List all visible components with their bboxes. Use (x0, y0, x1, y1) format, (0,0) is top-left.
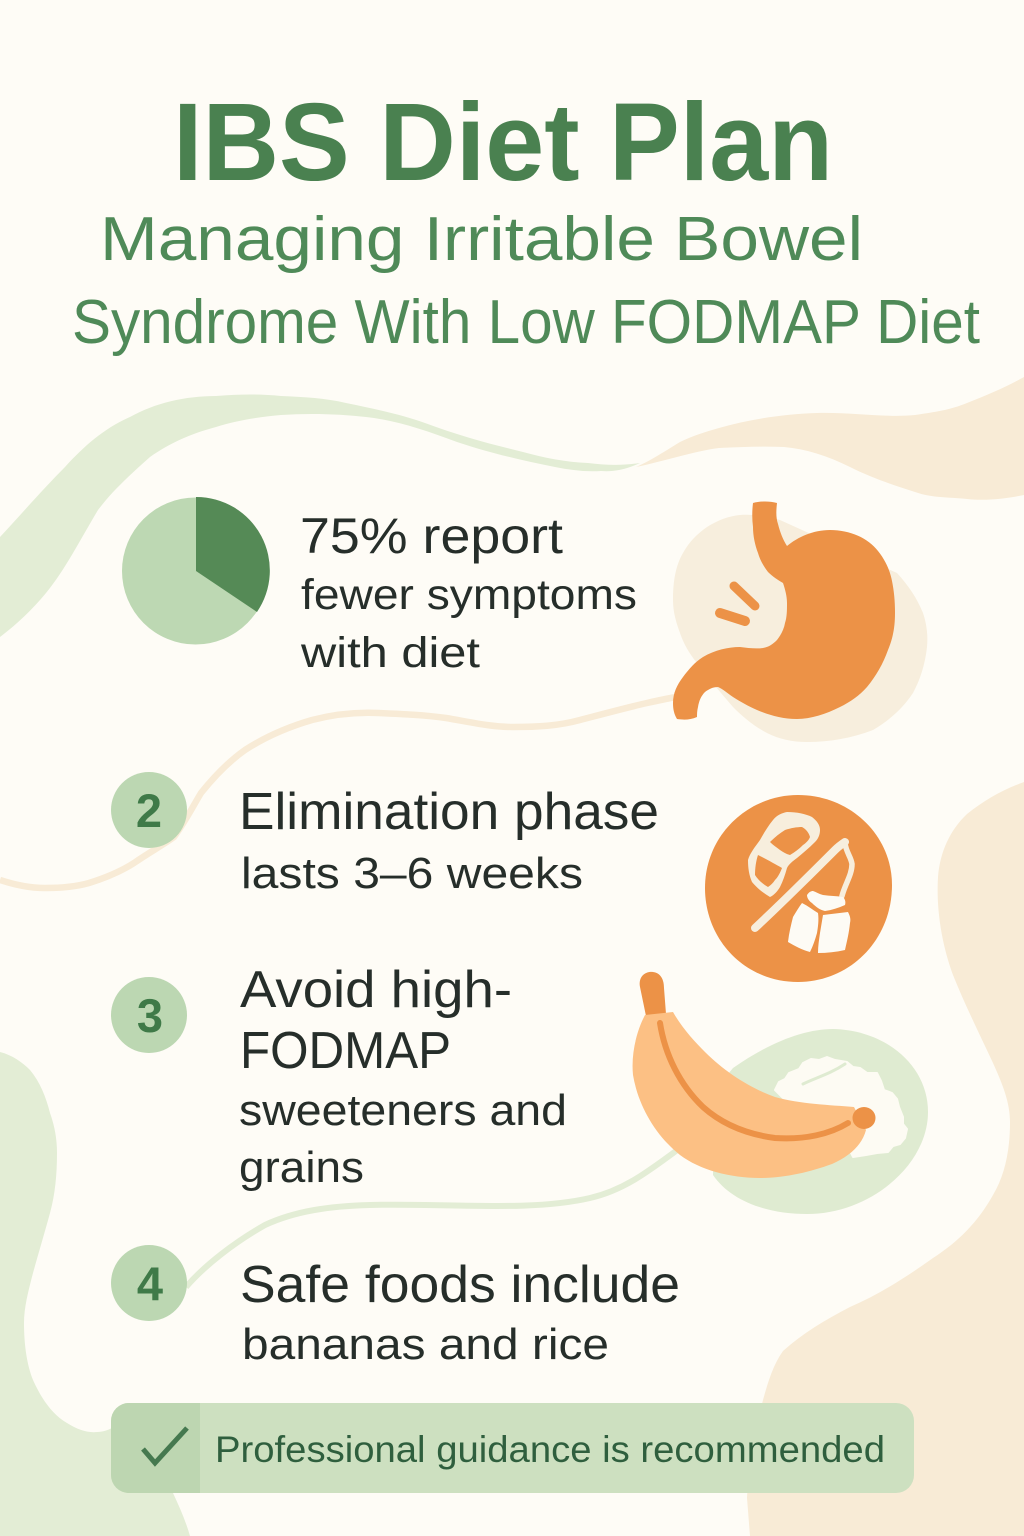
item 3: text: FODMAP (240, 1022, 451, 1080)
item 3: text (239, 961, 567, 1192)
item 4: text: bananas and rice (242, 1320, 609, 1369)
icon: no high-FODMAP foods (705, 795, 892, 982)
title: IBS Diet Plan (173, 81, 833, 204)
item 2: text: lasts 3–6 weeks (241, 849, 583, 898)
item 4: text (240, 1256, 680, 1369)
item 2: number badge: 2 (136, 784, 162, 837)
subtitle (72, 205, 980, 357)
item 3: number badge: 3 (137, 989, 163, 1042)
item 3: number badge (111, 977, 187, 1053)
icon: rice and banana (633, 972, 928, 1214)
background: green blob bottom left (0, 1052, 190, 1536)
background: peach blob right (747, 782, 1024, 1536)
item 1: text: with diet (300, 629, 480, 677)
subtitle: Managing Irritable Bowel (100, 205, 863, 274)
icon: check mark (143, 1428, 187, 1463)
item 3: text: Avoid high- (240, 961, 512, 1019)
item 3: text: sweeteners and (239, 1086, 567, 1135)
background: peach swoosh top right (636, 377, 1024, 500)
item 2: text (239, 783, 659, 898)
item 1: text: 75% report (300, 508, 563, 564)
item 1: text (300, 508, 637, 677)
callout: professional guidance banner: Professional guidance is recommended (215, 1429, 885, 1470)
item 2: text: Elimination phase (239, 783, 659, 841)
background: green swoosh top left (0, 394, 640, 637)
item 4: number badge (111, 1245, 187, 1321)
connector: peach wavy line (0, 697, 676, 888)
item 4: text: Safe foods include (240, 1256, 680, 1314)
connector: green wavy line (186, 1148, 680, 1287)
item 3: text: grains (239, 1143, 364, 1192)
icon: stomach (673, 502, 927, 742)
item 2: number badge (111, 772, 187, 848)
item 4: number badge: 4 (137, 1257, 163, 1310)
item 1: text: fewer symptoms (301, 571, 637, 619)
subtitle: Syndrome With Low FODMAP Diet (72, 288, 980, 357)
item 1: pie chart 75% (122, 497, 270, 644)
callout: professional guidance banner (111, 1403, 914, 1493)
